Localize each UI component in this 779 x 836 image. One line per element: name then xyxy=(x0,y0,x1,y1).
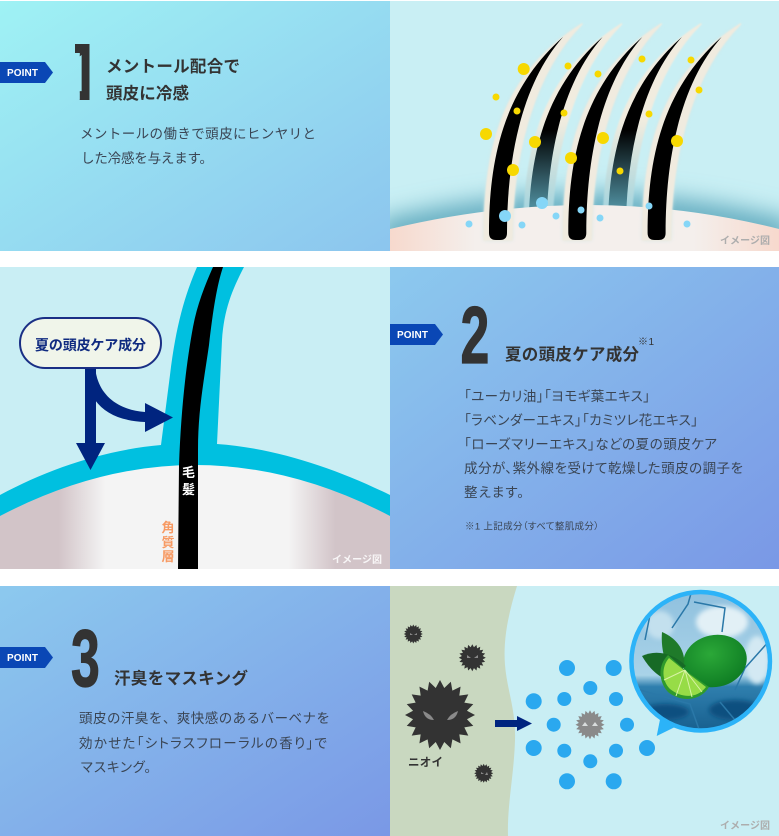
lime fruit xyxy=(678,629,752,693)
blue dots xyxy=(466,197,690,228)
body text 3 xyxy=(79,710,330,775)
hair label xyxy=(182,465,195,497)
point badge 1: POINT xyxy=(7,68,38,79)
number 2: 2 xyxy=(460,290,489,381)
panel: scalp diagram xyxy=(0,267,390,569)
leaves xyxy=(642,632,686,680)
odor zone xyxy=(390,586,517,836)
body text 3: 頭皮の汗臭を、爽快感のあるバーベナを xyxy=(79,710,330,726)
point badge 3: POINT xyxy=(7,653,38,664)
callout xyxy=(20,318,161,368)
arrow down xyxy=(76,366,105,470)
scalp cross-section xyxy=(0,465,390,569)
panel: odor masking illustration xyxy=(390,586,779,836)
number 3: 3 xyxy=(71,613,100,704)
stratum corneum label: 質 xyxy=(161,535,175,550)
body text 3: 効かせた「シトラスフローラルの香り」で xyxy=(79,736,327,751)
body text 2: 「ローズマリーエキス」などの夏の頭皮ケア xyxy=(464,437,717,452)
hair label: 髪 xyxy=(182,482,195,497)
scalp xyxy=(390,205,779,251)
body text 2: 「ラベンダーエキス」「カミツレ花エキス」 xyxy=(464,413,698,428)
body text 1: した冷感を与えます。 xyxy=(81,150,213,166)
odor label: ニオイ xyxy=(408,756,443,769)
stratum corneum label xyxy=(161,520,175,564)
heading: ingredients: 夏の頭皮ケア成分 xyxy=(505,344,640,364)
cyan layer xyxy=(0,267,390,516)
heading: masking: 汗臭をマスキング xyxy=(114,668,248,688)
body text 2: 成分が、紫外線を受けて乾燥した頭皮の調子を xyxy=(464,461,743,476)
hair shaft xyxy=(178,267,223,569)
heading: menthol: 頭皮に冷感 xyxy=(106,83,190,103)
point badge 2 xyxy=(390,324,443,345)
body text 2: 整えます。 xyxy=(464,485,524,500)
full hairs xyxy=(484,24,741,240)
germ eyes xyxy=(410,633,488,775)
heading: ingredients xyxy=(505,337,654,364)
panel: point 2 text xyxy=(390,267,779,569)
body text 1 xyxy=(80,126,316,166)
masked germ xyxy=(576,710,604,739)
number 1 xyxy=(75,44,90,100)
yellow dots xyxy=(480,56,702,176)
number 1: 1 xyxy=(67,27,103,118)
panel: point 3 text xyxy=(0,586,390,836)
faded hairs xyxy=(523,23,702,208)
image caption 2: イメージ図 xyxy=(332,554,382,566)
panel: hair illustration with cooling dots xyxy=(380,1,779,251)
speech bubble with lime on ice xyxy=(629,590,772,736)
lime slice xyxy=(660,655,709,699)
body text 3: マスキング。 xyxy=(80,760,158,775)
heading: menthol: メントール配合で xyxy=(106,57,240,76)
footnote: ※1 上記成分（すべて整肌成分） xyxy=(465,520,599,532)
point badge 3 xyxy=(0,647,53,668)
stratum corneum label: 角 xyxy=(161,520,175,535)
panel: point 1 text xyxy=(0,1,390,251)
heading: ingredients: ※1 xyxy=(638,337,654,348)
image caption 3: イメージ図 xyxy=(720,820,770,832)
stratum corneum label: 層 xyxy=(161,549,175,564)
arrow curved xyxy=(96,374,173,432)
body text 2 xyxy=(464,389,743,500)
heading: menthol xyxy=(106,57,240,103)
image caption 1: イメージ図 xyxy=(720,235,770,247)
body text 1: メントールの働きで頭皮にヒンヤリと xyxy=(80,126,316,142)
hair label: 毛 xyxy=(182,465,195,480)
odor germs xyxy=(404,624,493,783)
callout: 夏の頭皮ケア成分 xyxy=(35,337,146,353)
point badge 1 xyxy=(0,62,53,83)
body text 2: 「ユーカリ油」「ヨモギ葉エキス」 xyxy=(464,389,650,404)
fragrance dots xyxy=(526,660,655,789)
point badge 2: POINT xyxy=(397,330,428,341)
arrow right xyxy=(495,716,532,731)
